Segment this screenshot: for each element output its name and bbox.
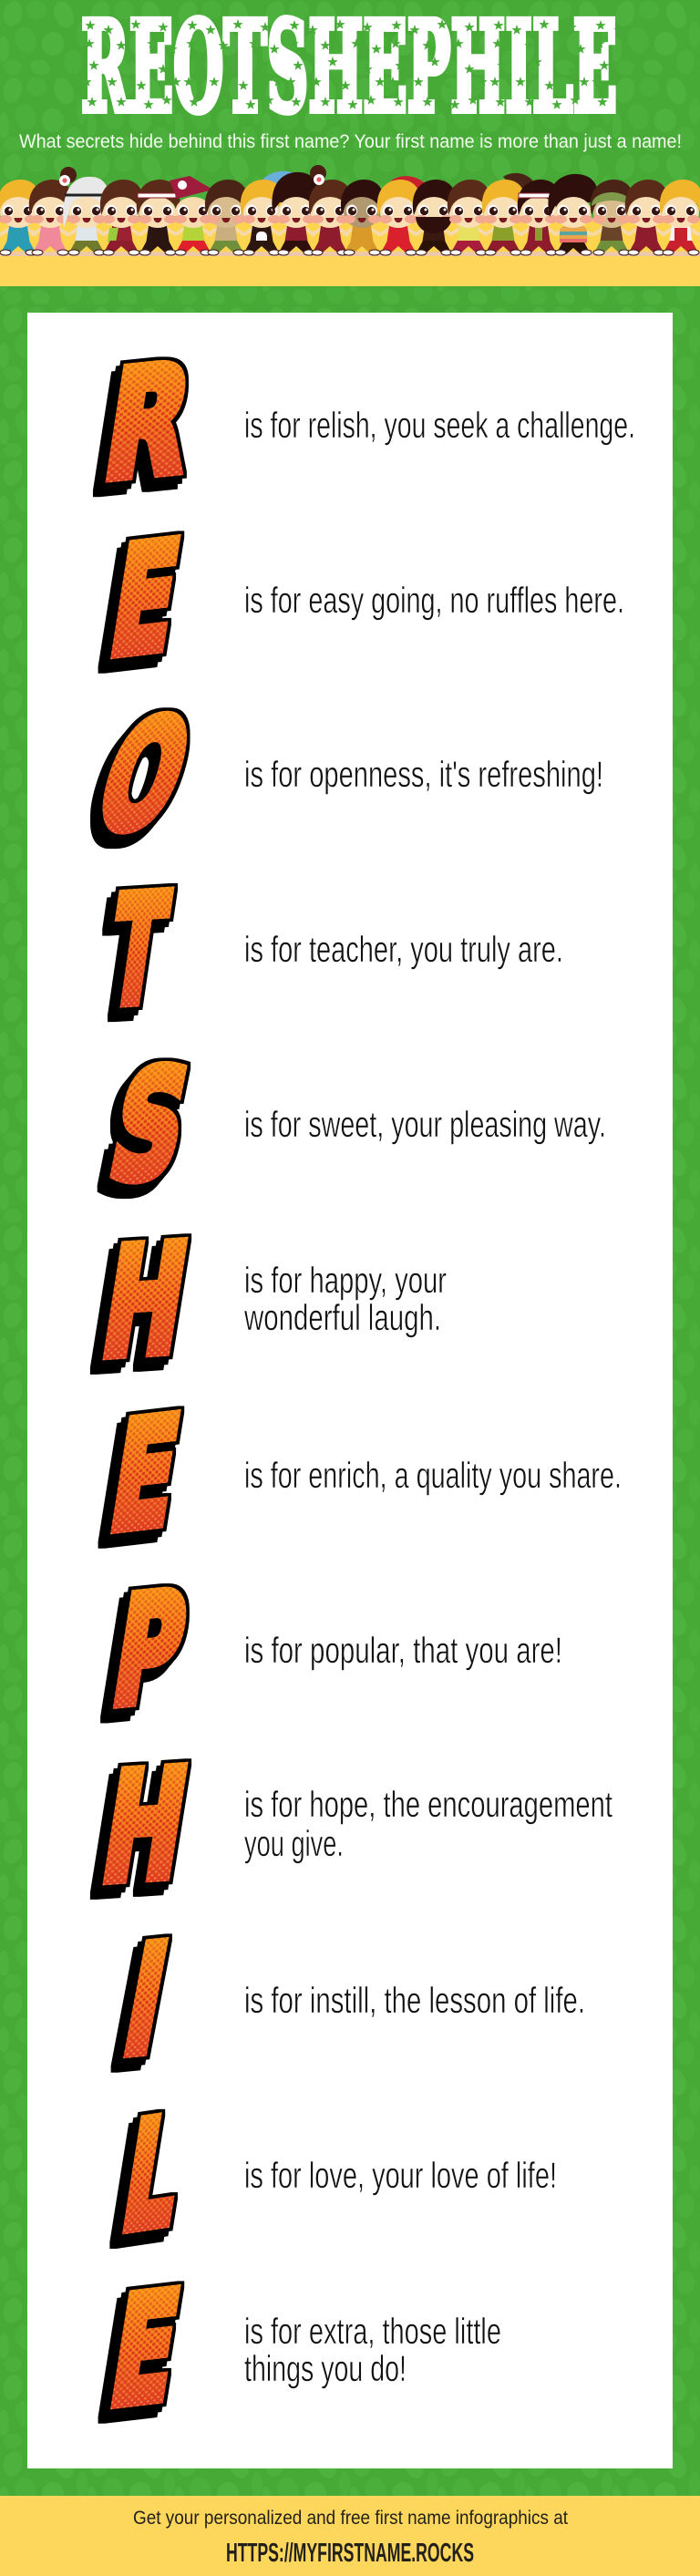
character 1	[0, 180, 40, 255]
character 4	[100, 180, 143, 255]
character 11	[341, 180, 384, 255]
yellow ground band	[0, 219, 700, 286]
line H	[244, 1785, 612, 1864]
character 20	[660, 180, 700, 255]
character 15	[482, 173, 536, 255]
letter S: S	[98, 1036, 201, 1215]
letter L: L	[113, 2086, 191, 2265]
character 8	[241, 171, 294, 255]
letter I: I	[112, 1913, 179, 2089]
letter T: T	[100, 862, 176, 1039]
letter P: P	[103, 1561, 196, 1740]
character 13	[413, 180, 456, 255]
line L: is for love, your love of life!	[244, 2156, 557, 2196]
footer text: Get your personalized and free first name infographics at	[133, 2508, 568, 2529]
line I: is for instill, the lesson of life.	[244, 1981, 585, 2021]
character 6	[170, 176, 213, 255]
letter R: R	[95, 333, 201, 513]
character 5	[137, 180, 180, 255]
footer	[0, 2496, 700, 2576]
line H	[243, 1261, 447, 1338]
letter E: E	[100, 2261, 189, 2440]
character 16	[518, 180, 561, 255]
line E: things you do!	[244, 2349, 407, 2389]
panel: acrostic	[27, 313, 673, 2468]
character 3	[63, 177, 110, 255]
line P: is for popular, that you are!	[244, 1631, 562, 1671]
letter H: H	[92, 1738, 197, 1916]
character 9	[272, 172, 321, 255]
line H: wonderful laugh.	[243, 1298, 441, 1338]
letter E: E	[100, 510, 189, 690]
illustration: row of costumed characters	[0, 165, 700, 255]
line H: is for happy, your	[244, 1261, 447, 1301]
line E: is for extra, those little	[244, 2312, 501, 2352]
character 7	[205, 180, 248, 255]
character 10	[309, 165, 352, 255]
character 17	[548, 174, 599, 255]
line T: is for teacher, you truly are.	[244, 930, 563, 970]
letter E: E	[100, 1386, 189, 1565]
letter H: H	[92, 1213, 197, 1391]
line H: you give.	[244, 1824, 344, 1864]
character 14	[448, 180, 490, 255]
line E	[244, 2312, 501, 2389]
character 12	[377, 176, 426, 255]
footer url: HTTPS://MYFIRSTNAME.ROCKS	[226, 2539, 474, 2568]
character 19	[625, 180, 668, 255]
letter O: O	[80, 684, 208, 867]
character 2	[29, 167, 77, 255]
character 18	[591, 180, 633, 255]
